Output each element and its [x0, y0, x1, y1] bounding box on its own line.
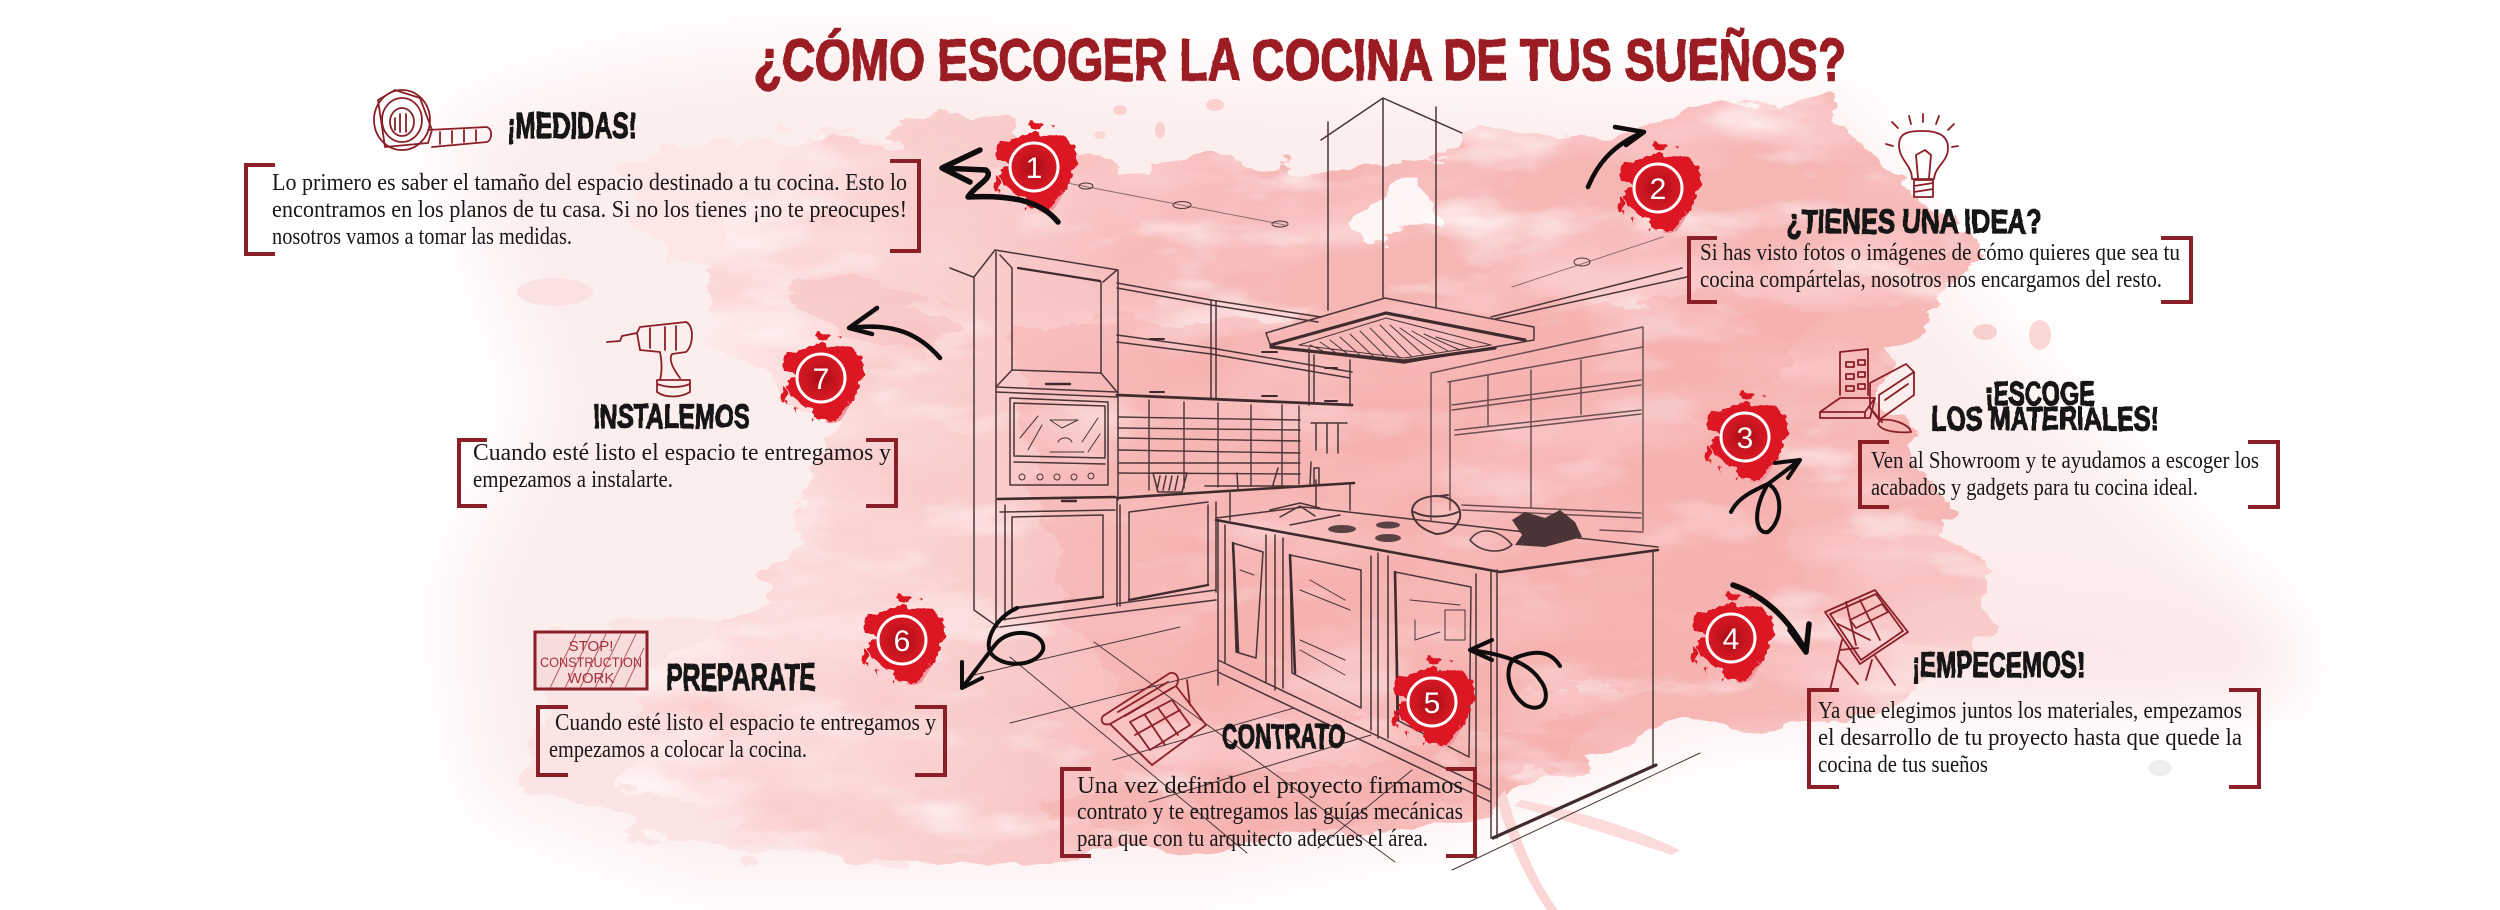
text block with brackets: Ven al Showroom y te ayudamos a escoger los [1871, 448, 2259, 474]
badge 1 [993, 122, 1076, 212]
arrow 3 [1731, 460, 1800, 532]
text block with brackets [1860, 442, 2278, 507]
text block with brackets: Cuando esté listo el espacio te entregamos y [473, 440, 891, 466]
step 6: preparate [535, 595, 1043, 775]
heading: medidas: ¡MEDIDAS! [507, 105, 637, 146]
text block with brackets: Cuando esté listo el espacio te entregamos y [555, 710, 936, 736]
badge 4 [1690, 593, 1773, 683]
text block with brackets: acabados y gadgets para tu cocina ideal. [1871, 475, 2198, 501]
background: watercolor wash [440, 45, 2300, 910]
text block with brackets: Lo primero es saber el tamaño del espacio destinado a tu cocina. Esto lo [272, 170, 907, 196]
heading: escoge los materiales: ¡ESCOGE [1985, 375, 2095, 412]
text block with brackets [1689, 238, 2191, 302]
cabinets and oven [950, 250, 1354, 627]
badge 1: 1 [1026, 152, 1042, 185]
step 2: idea [1588, 114, 2191, 302]
hood and ceiling [1062, 98, 1687, 363]
badge 2 [1617, 143, 1700, 233]
step 1: medidas [246, 90, 1076, 254]
heading: empecemos: ¡EMPECEMOS! [1912, 644, 2085, 685]
badge 7 [780, 333, 863, 423]
island [1216, 495, 1658, 838]
icon: blueprint scroll [1102, 673, 1206, 765]
text block with brackets: el desarrollo de tu proyecto hasta que quede la [1818, 725, 2242, 751]
text block with brackets [1062, 769, 1475, 856]
badge 6 [861, 595, 944, 685]
heading: instalemos: INSTALEMOS [593, 398, 750, 436]
heading: escoge los materiales: LOS MATERIALES! [1931, 400, 2159, 437]
badge 5 [1391, 657, 1474, 747]
text block with brackets [459, 440, 896, 506]
icon: bricks and trowel [1820, 349, 1914, 432]
badge 5: 5 [1424, 687, 1440, 720]
icon: drafting table [1825, 590, 1908, 690]
badge 6: 6 [894, 625, 910, 658]
heading: contrato: CONTRATO [1222, 718, 1345, 756]
window [1431, 327, 1643, 532]
icon: construction sign: CONSTRUCTION [540, 654, 642, 670]
step 7: instalemos [459, 308, 940, 506]
badge 4: 4 [1723, 623, 1739, 656]
text block with brackets [1809, 690, 2259, 787]
text block with brackets: cocina de tus sueños [1818, 752, 1988, 778]
text block with brackets [246, 161, 919, 254]
arrow 5 [1470, 640, 1560, 708]
text block with brackets: contrato y te entregamos las guías mecánicas [1077, 799, 1463, 825]
text block with brackets: cocina compártelas, nosotros nos encargamos del resto. [1700, 267, 2162, 293]
icon: construction sign: STOP! [569, 638, 613, 655]
icon: construction sign: WORK [568, 670, 614, 687]
text block with brackets: empezamos a colocar la cocina. [549, 737, 807, 763]
badge 7: 7 [813, 363, 829, 396]
text block with brackets: empezamos a instalarte. [473, 467, 673, 493]
illustration: kitchen line drawing [950, 98, 1700, 870]
icon: construction sign [535, 632, 647, 689]
badge 3: 3 [1737, 422, 1753, 455]
heading: escoge los materiales [1931, 375, 2159, 437]
floor lines [974, 627, 1700, 870]
arrow 6 [962, 608, 1043, 688]
badge 3 [1704, 392, 1787, 482]
badge 2: 2 [1650, 173, 1666, 206]
heading: tienes una idea: ¿TIENES UNA IDEA? [1786, 203, 2042, 241]
heading: preparate: PREPARATE [666, 657, 816, 699]
text block with brackets: Ya que elegimos juntos los materiales, empezamos [1818, 698, 2242, 724]
step 4: empecemos [1690, 585, 2259, 787]
arrow 4 [1733, 585, 1809, 652]
text block with brackets: encontramos en los planos de tu casa. Si no los tienes ¡no te preocupes! [272, 197, 907, 223]
text block with brackets: para que con tu arquitecto adecues el área. [1077, 826, 1428, 852]
text block with brackets: Si has visto fotos o imágenes de cómo quieres que sea tu [1700, 240, 2180, 266]
step 5: contrato [1062, 640, 1560, 856]
step 3: materiales [1704, 349, 2278, 532]
arrow 2 [1588, 127, 1644, 187]
text block with brackets: Una vez definido el proyecto firmamos [1077, 773, 1463, 799]
icon: drill [607, 322, 692, 396]
title: ¿CÓMO ESCOGER LA COCINA DE TUS SUEÑOS? [754, 28, 1846, 93]
text block with brackets [538, 707, 945, 775]
text block with brackets: nosotros vamos a tomar las medidas. [272, 224, 572, 250]
arrow 7 [849, 308, 940, 358]
arrow 1 [942, 150, 1058, 222]
icon: tape measure [374, 90, 491, 150]
icon: light bulb [1886, 114, 1958, 197]
